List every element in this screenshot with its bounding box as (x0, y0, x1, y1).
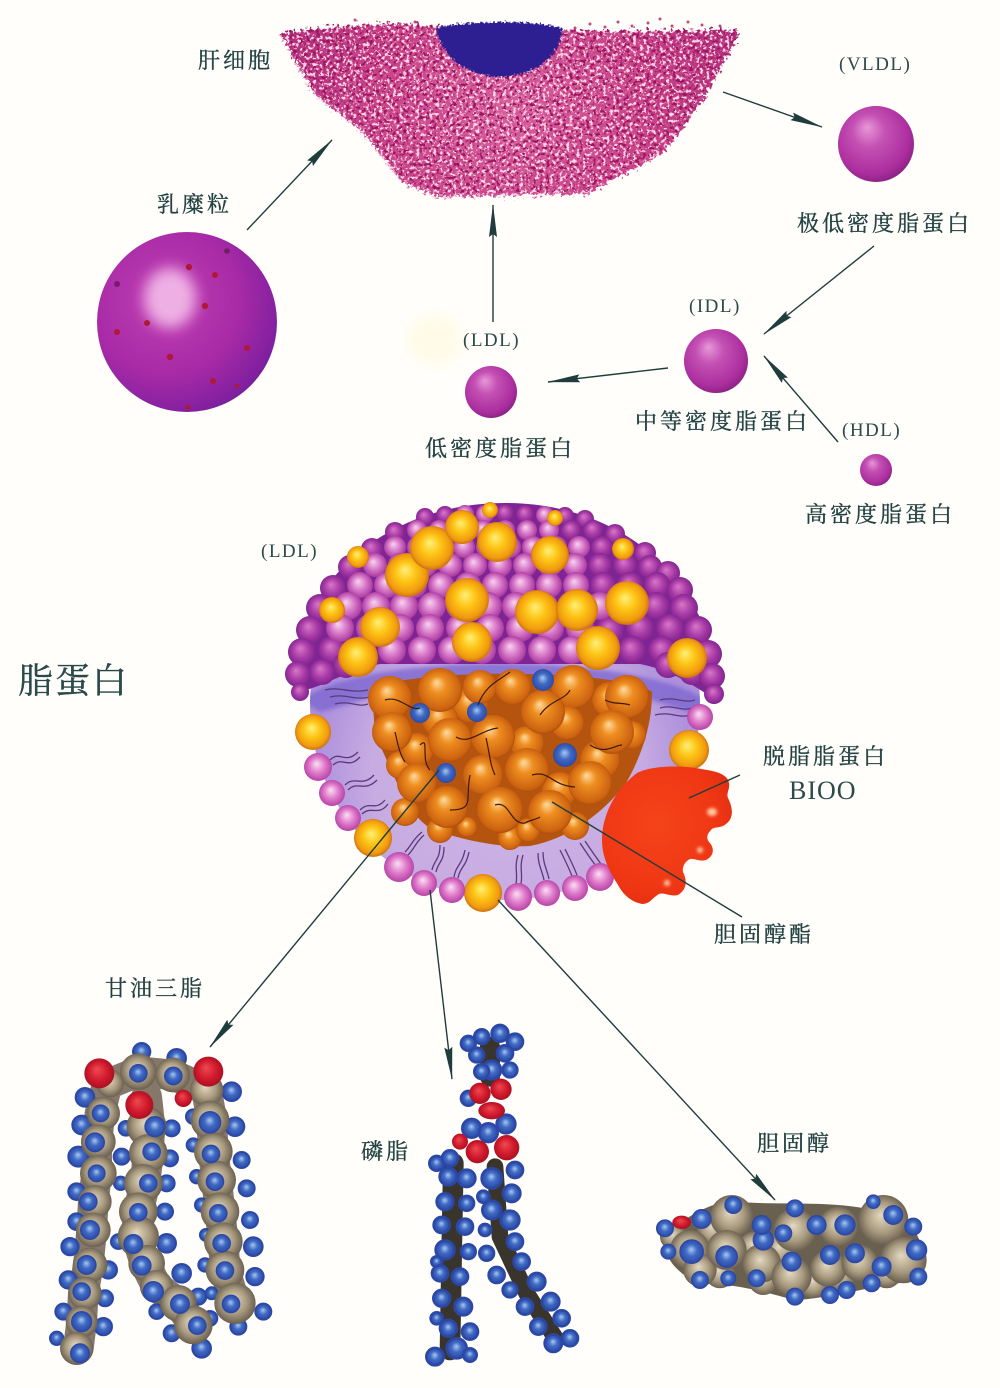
hydrogen atoms (71, 1065, 240, 1363)
label: VLDL: (VLDL) (839, 54, 911, 75)
faint yellow paper stain (407, 314, 463, 366)
arrow: to phospholipid (430, 890, 452, 1079)
label: BIOO: BIOO (789, 776, 857, 805)
dome yellow cholesterol (319, 502, 707, 678)
label: liver cell: 肝细胞 (198, 44, 273, 75)
illustration: LDL particle cutaway (285, 502, 732, 912)
carbon atoms (60, 1053, 256, 1365)
tan underlay (665, 1202, 923, 1300)
arrow: chylomicron to liver (247, 140, 332, 230)
shell lipid tails (325, 689, 695, 884)
core triglyceride blue balls (410, 669, 577, 783)
dome phospholipid heads outer (285, 504, 725, 704)
core dark base (372, 674, 652, 846)
liver cell nucleus (436, 22, 562, 77)
blue hydrogen atoms (426, 1025, 578, 1365)
arrow: VLDL to IDL (764, 246, 874, 334)
label: HDL: (HDL) (842, 420, 901, 441)
backbone strands (450, 1047, 557, 1350)
shell yellow cholesterol (295, 714, 709, 912)
arrow: LDL to liver (492, 205, 494, 322)
illustration: HDL sphere (860, 454, 892, 486)
arrow: IDL to LDL (548, 368, 668, 382)
core cholesterol ester balls (368, 665, 649, 842)
label: cholesterol ester: 胆固醇酯 (714, 918, 814, 949)
hydrogen atoms (657, 1195, 927, 1305)
dome base (294, 503, 718, 700)
label: phospholipid: 磷脂 (361, 1135, 411, 1166)
label: LDL: (LDL) (463, 330, 520, 351)
leader line: cholesterol ester (552, 802, 742, 917)
scattered granules above cell (354, 18, 722, 30)
apolipoprotein B100 red protein (602, 766, 732, 904)
molecule: phospholipid (426, 1025, 578, 1365)
label: intermediate density lipoprotein: 中等密度脂蛋白 (635, 405, 810, 436)
arrow: liver to VLDL (723, 92, 822, 127)
sphere highlight (144, 268, 196, 328)
shell phospholipid heads (304, 704, 713, 911)
label: IDL: (IDL) (689, 296, 741, 317)
label: triglyceride: 甘油三脂 (105, 972, 205, 1003)
core squiggles (385, 672, 630, 823)
heading: lipoprotein: 脂蛋白 (18, 654, 129, 704)
core cholesterol ester balls under (386, 682, 646, 850)
carbon atoms (670, 1195, 927, 1297)
particle interior (310, 510, 700, 900)
label: LDL cutaway: (LDL) (261, 541, 318, 562)
illustration: IDL sphere (684, 329, 748, 393)
oxygen atom (672, 1216, 691, 1229)
red oxygen atoms (452, 1079, 519, 1163)
illustration: liver cell (280, 18, 738, 197)
label: low density lipoprotein: 低密度脂蛋白 (425, 432, 575, 463)
molecule: triglyceride (50, 1043, 271, 1365)
illustration: LDL sphere (465, 366, 517, 418)
protein highlights (664, 808, 717, 886)
arrow: HDL to IDL (764, 356, 838, 442)
carbon chain underlay (78, 1072, 235, 1348)
arrow: to cholesterol (498, 900, 775, 1200)
lipid spots (114, 248, 250, 410)
small side atoms (50, 1043, 271, 1358)
carbon atoms under (660, 1213, 902, 1298)
molecule: cholesterol (657, 1195, 927, 1305)
arrow: to triglyceride (210, 770, 439, 1047)
illustration: VLDL sphere (838, 106, 914, 182)
inner shell band (300, 663, 715, 712)
illustration: chylomicron sphere (97, 232, 277, 412)
label: high density lipoprotein: 高密度脂蛋白 (805, 498, 955, 529)
oxygen atoms (84, 1057, 223, 1119)
label: apolipoprotein: 脱脂脂蛋白 (763, 740, 888, 771)
dome phospholipid heads light (326, 505, 614, 664)
label: chylomicron: 乳糜粒 (157, 188, 232, 219)
leader line: apolipoprotein (689, 775, 740, 798)
label: cholesterol: 胆固醇 (757, 1127, 832, 1158)
label: very low density lipoprotein: 极低密度脂蛋白 (797, 207, 972, 238)
